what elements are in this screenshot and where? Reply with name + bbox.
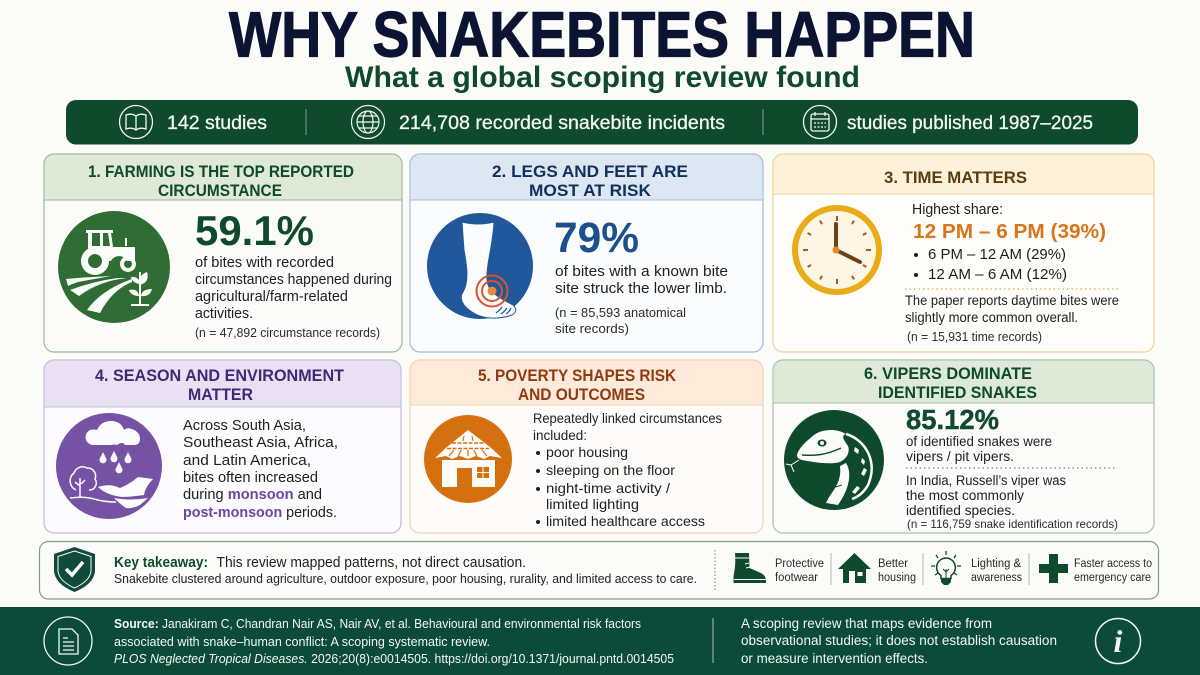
sample size: farming: (n = 47,892 circumstance records)	[195, 325, 380, 340]
panel header: legs and feet: MOST AT RISK	[529, 182, 651, 200]
icon: house	[838, 553, 871, 583]
text: monsoon description	[183, 417, 338, 521]
stat: studies	[120, 106, 267, 138]
text: study note: observational studies; it does not establish causation	[741, 633, 1057, 648]
icon: document	[44, 617, 92, 665]
list: linked circumstances: limited lighting	[546, 496, 639, 512]
stat: 85.12%: 85.12%	[906, 404, 999, 435]
sample size: snakes: (n = 116,759 snake identification records)	[907, 517, 1118, 531]
text: linked circumstances intro: Repeatedly linked circumstances	[533, 410, 722, 426]
list: linked circumstances: sleeping on the floor	[546, 462, 675, 478]
text: Russell's viper: identified species.	[906, 503, 1015, 518]
text: Russell's viper: the most commonly	[906, 488, 1024, 503]
text: bite site description: site struck the lower limb.	[555, 280, 727, 297]
icon: boot	[734, 553, 766, 583]
text: vipers share	[906, 434, 1052, 464]
icon: tractor and field	[58, 211, 170, 323]
panel: time	[773, 154, 1154, 352]
icon: rain and landscape	[56, 413, 162, 519]
sample size: bite site: (n = 85,593 anatomical	[555, 305, 686, 320]
icon: globe	[352, 106, 384, 138]
panel header: legs and feet	[410, 154, 763, 200]
list: linked circumstances: limited healthcare access	[546, 513, 705, 529]
text: source citation: PLOS Neglected Tropical Diseases. 2026;20(8):e0014505. https://doi.org/10.1371/journal.pntd.0014505	[114, 652, 674, 666]
action: faster emergency care: emergency care	[1074, 572, 1151, 584]
action: faster emergency care: Faster access to	[1074, 558, 1152, 570]
action: protective footwear	[734, 553, 824, 584]
panel header: poverty	[410, 360, 763, 405]
action: lighting and awareness	[931, 551, 1022, 585]
sample size: bite site	[555, 305, 686, 336]
title: WHY SNAKEBITES HAPPEN	[229, 0, 975, 70]
icon: calendar	[804, 106, 836, 138]
text: farming description: of bites with recorded	[195, 254, 334, 271]
action: lighting and awareness: Lighting &	[971, 558, 1021, 570]
text: monsoon description: bites often increased	[183, 469, 318, 486]
text: bite site description	[555, 263, 728, 297]
icon: information: i	[1114, 623, 1123, 659]
subtitle: What a global scoping review found	[345, 61, 860, 94]
text: source citation: Source: Janakiram C, Chandran Nair AS, Nair AV, et al. Behavioural and environmental risk factors	[114, 617, 641, 631]
text: Russell's viper: In India, Russell’s viper was	[906, 473, 1066, 488]
stat: 12 PM to 6 PM: 12 PM – 6 PM (39%)	[913, 220, 1106, 243]
panel: poverty	[410, 360, 763, 533]
action: better housing: housing	[878, 572, 916, 584]
list: linked circumstances: poor housing	[546, 444, 628, 460]
stat: incidents	[352, 106, 725, 138]
action: faster emergency care	[1039, 554, 1152, 584]
text: farming description: circumstances happened during	[195, 271, 392, 288]
text: monsoon description: Southeast Asia, Africa,	[183, 434, 338, 451]
panel header: vipers	[773, 360, 1154, 403]
panel header: season: 4. SEASON AND ENVIRONMENT	[95, 367, 344, 385]
panel header: vipers: 6. VIPERS DOMINATE	[864, 365, 1032, 383]
panel header: farming	[44, 154, 402, 200]
footer	[0, 607, 1200, 675]
icon: light bulb	[931, 551, 961, 585]
text: linked circumstances intro: included:	[533, 427, 587, 443]
icon: shield	[54, 547, 95, 592]
panel header: poverty: 5. POVERTY SHAPES RISK	[478, 367, 676, 385]
text: study note: A scoping review that maps evidence from	[741, 616, 992, 631]
sample size: time: (n = 15,931 time records)	[907, 329, 1042, 344]
key takeaway panel	[40, 542, 1158, 599]
text: vipers share: vipers / pit vipers.	[906, 449, 1014, 464]
text: daytime note: slightly more common overall.	[905, 310, 1078, 325]
panel header: time	[773, 154, 1154, 194]
icon: information	[1096, 618, 1140, 664]
text: farming description: activities.	[195, 305, 253, 322]
panel header: poverty: AND OUTCOMES	[518, 386, 645, 404]
icon: medical cross	[1039, 554, 1068, 583]
text: linked circumstances intro	[533, 410, 722, 443]
panel header: season: MATTER	[188, 386, 253, 404]
action: better housing: Better	[878, 558, 908, 570]
panel: legs and feet	[410, 154, 763, 352]
panel header: legs and feet: 2. LEGS AND FEET ARE	[492, 163, 688, 181]
list: linked circumstances: night-time activity /	[546, 480, 670, 496]
icon: thatched house	[424, 415, 512, 503]
text: key takeaway: Key takeaway:	[114, 555, 208, 571]
icon: book	[120, 106, 152, 138]
stat: 59.1%: 59.1%	[195, 207, 314, 254]
text: farming description: agricultural/farm-related	[195, 288, 348, 305]
text: daytime note	[905, 293, 1119, 325]
text: source citation	[114, 617, 674, 666]
icon: viper	[784, 410, 884, 510]
text: key takeaway: This review mapped patterns, not direct causation.	[216, 555, 526, 571]
text: key takeaway: Snakebite clustered around agriculture, outdoor exposure, poor housing, rurality, and limited access to care.	[114, 572, 697, 586]
list: linked circumstances	[536, 444, 705, 529]
text: farming description	[195, 254, 392, 322]
text: source citation: associated with snake–human conflict: A scoping systematic review.	[114, 635, 490, 649]
text: highest share: Highest share:	[912, 201, 1003, 218]
action: better housing	[838, 553, 916, 584]
text: monsoon description: Across South Asia,	[183, 417, 306, 434]
panel header: vipers: IDENTIFIED SNAKES	[878, 384, 1037, 402]
panel header: farming: CIRCUMSTANCE	[158, 182, 282, 200]
text: vipers share: of identified snakes were	[906, 434, 1052, 449]
text: study note	[741, 616, 1057, 666]
stats bar	[66, 100, 1138, 144]
action: protective footwear: Protective	[775, 558, 824, 570]
stat: years	[804, 106, 1093, 138]
icon: clock	[795, 208, 879, 292]
action: protective footwear: footwear	[775, 572, 818, 584]
stat: studies: 142 studies	[167, 112, 267, 134]
sample size: bite site: site records)	[555, 321, 629, 336]
panel: season and environment	[44, 360, 401, 533]
text: monsoon description: post-monsoon periods.	[183, 504, 337, 521]
list: other time bands: 12 AM – 6 AM (12%)	[928, 266, 1067, 283]
stat: 79%: 79%	[554, 214, 639, 262]
list: other time bands	[914, 246, 1067, 283]
text: monsoon description: during monsoon and	[183, 486, 322, 503]
text: daytime note: The paper reports daytime bites were	[905, 293, 1119, 308]
action: lighting and awareness: awareness	[971, 572, 1022, 584]
panel header: time: 3. TIME MATTERS	[884, 169, 1027, 187]
text: key takeaway	[114, 555, 697, 586]
icon: foot with bite mark	[427, 213, 533, 319]
text: study note: or measure intervention effects.	[741, 651, 928, 666]
text: Russell's viper	[906, 473, 1066, 518]
stat: incidents: 214,708 recorded snakebite incidents	[399, 112, 725, 134]
list: other time bands: 6 PM – 12 AM (29%)	[928, 246, 1066, 263]
text: monsoon description: and Latin America,	[183, 452, 311, 469]
panel: vipers	[773, 360, 1154, 533]
panel header: season	[44, 360, 401, 407]
panel: farming	[44, 154, 402, 352]
panel header: farming: 1. FARMING IS THE TOP REPORTED	[88, 163, 354, 181]
stat: years: studies published 1987–2025	[847, 112, 1093, 134]
text: bite site description: of bites with a known bite	[555, 263, 728, 280]
